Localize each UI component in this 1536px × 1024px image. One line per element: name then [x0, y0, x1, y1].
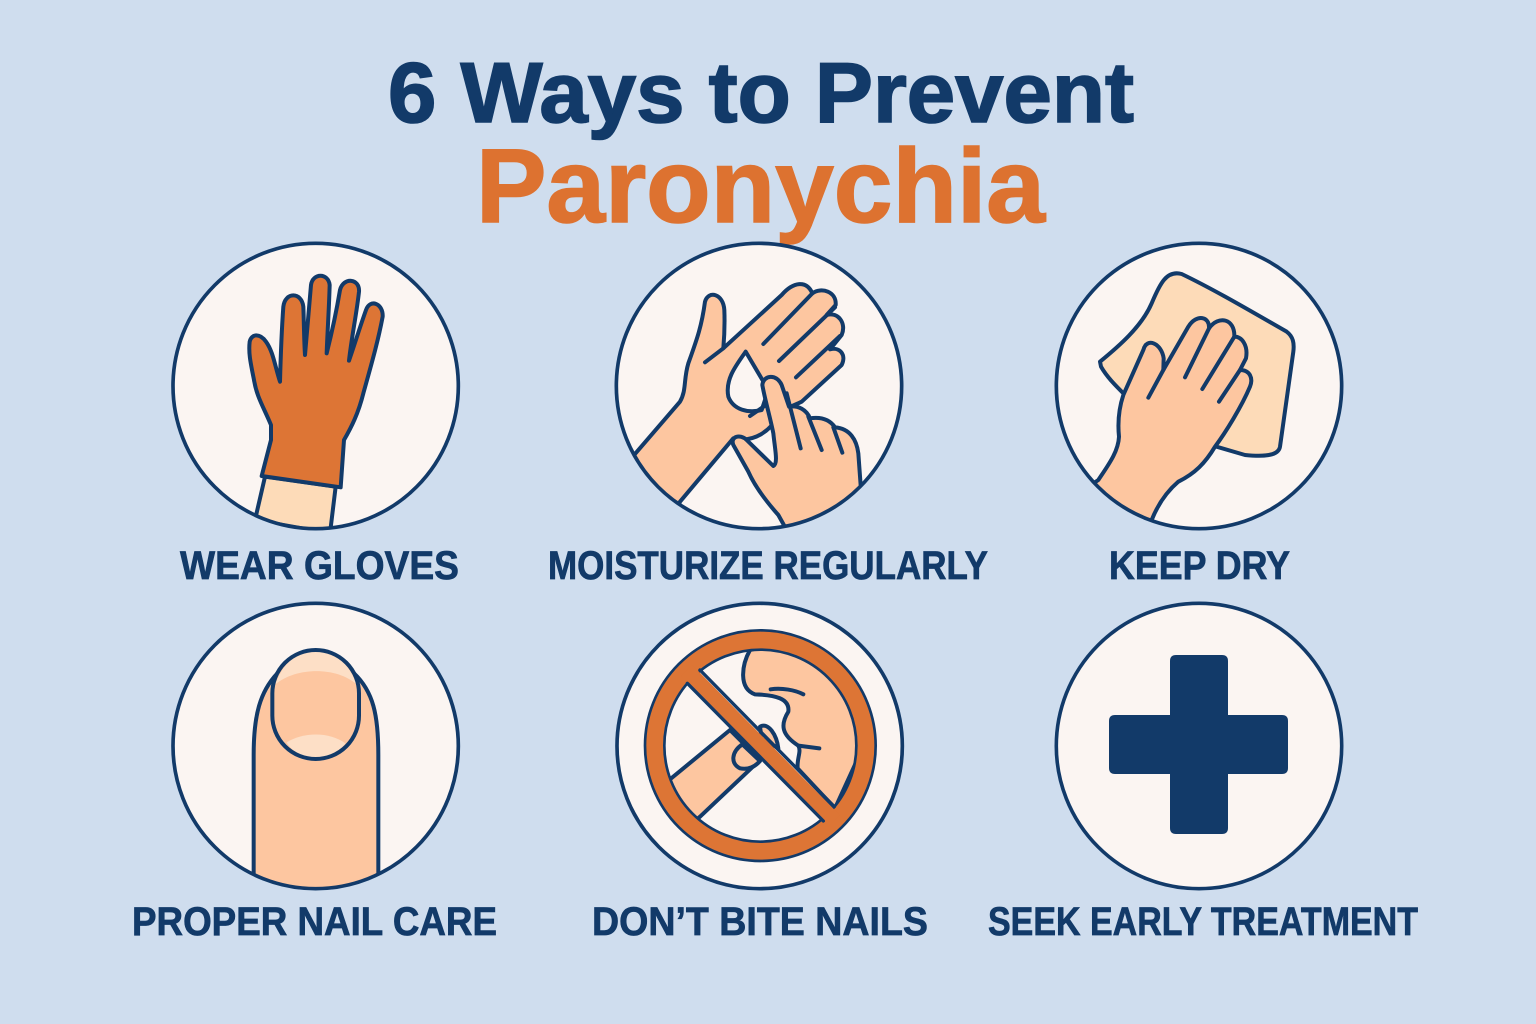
icon: no nail biting sign in circle — [617, 603, 902, 889]
icon: hand with towel in circle — [1056, 243, 1342, 533]
panel: seek early treatment — [988, 603, 1418, 944]
label: keep dry: KEEP DRY — [1109, 544, 1290, 588]
label: wear gloves: WEAR GLOVES — [180, 544, 459, 588]
icon: hands applying moisturizer in circle — [616, 243, 902, 530]
label: proper nail care: PROPER NAIL CARE — [132, 900, 497, 944]
panel: moisturize regularly — [548, 243, 988, 588]
title: 6 Ways to Prevent — [388, 46, 1134, 141]
title: Paronychia — [476, 128, 1047, 245]
label: moisturize regularly: MOISTURIZE REGULARLY — [548, 544, 988, 588]
label: seek early treatment: SEEK EARLY TREATMENT — [988, 900, 1418, 944]
panel: proper nail care — [132, 603, 497, 944]
panel: don't bite nails — [592, 603, 928, 944]
title — [388, 46, 1134, 245]
icon: gloved hand in circle — [173, 243, 458, 533]
icon: fingernail in circle — [173, 603, 458, 895]
label: don't bite nails: DON’T BITE NAILS — [592, 900, 928, 944]
panel: wear gloves — [173, 243, 459, 588]
panel: keep dry — [1056, 243, 1342, 588]
icon: medical cross in circle — [1056, 603, 1342, 889]
